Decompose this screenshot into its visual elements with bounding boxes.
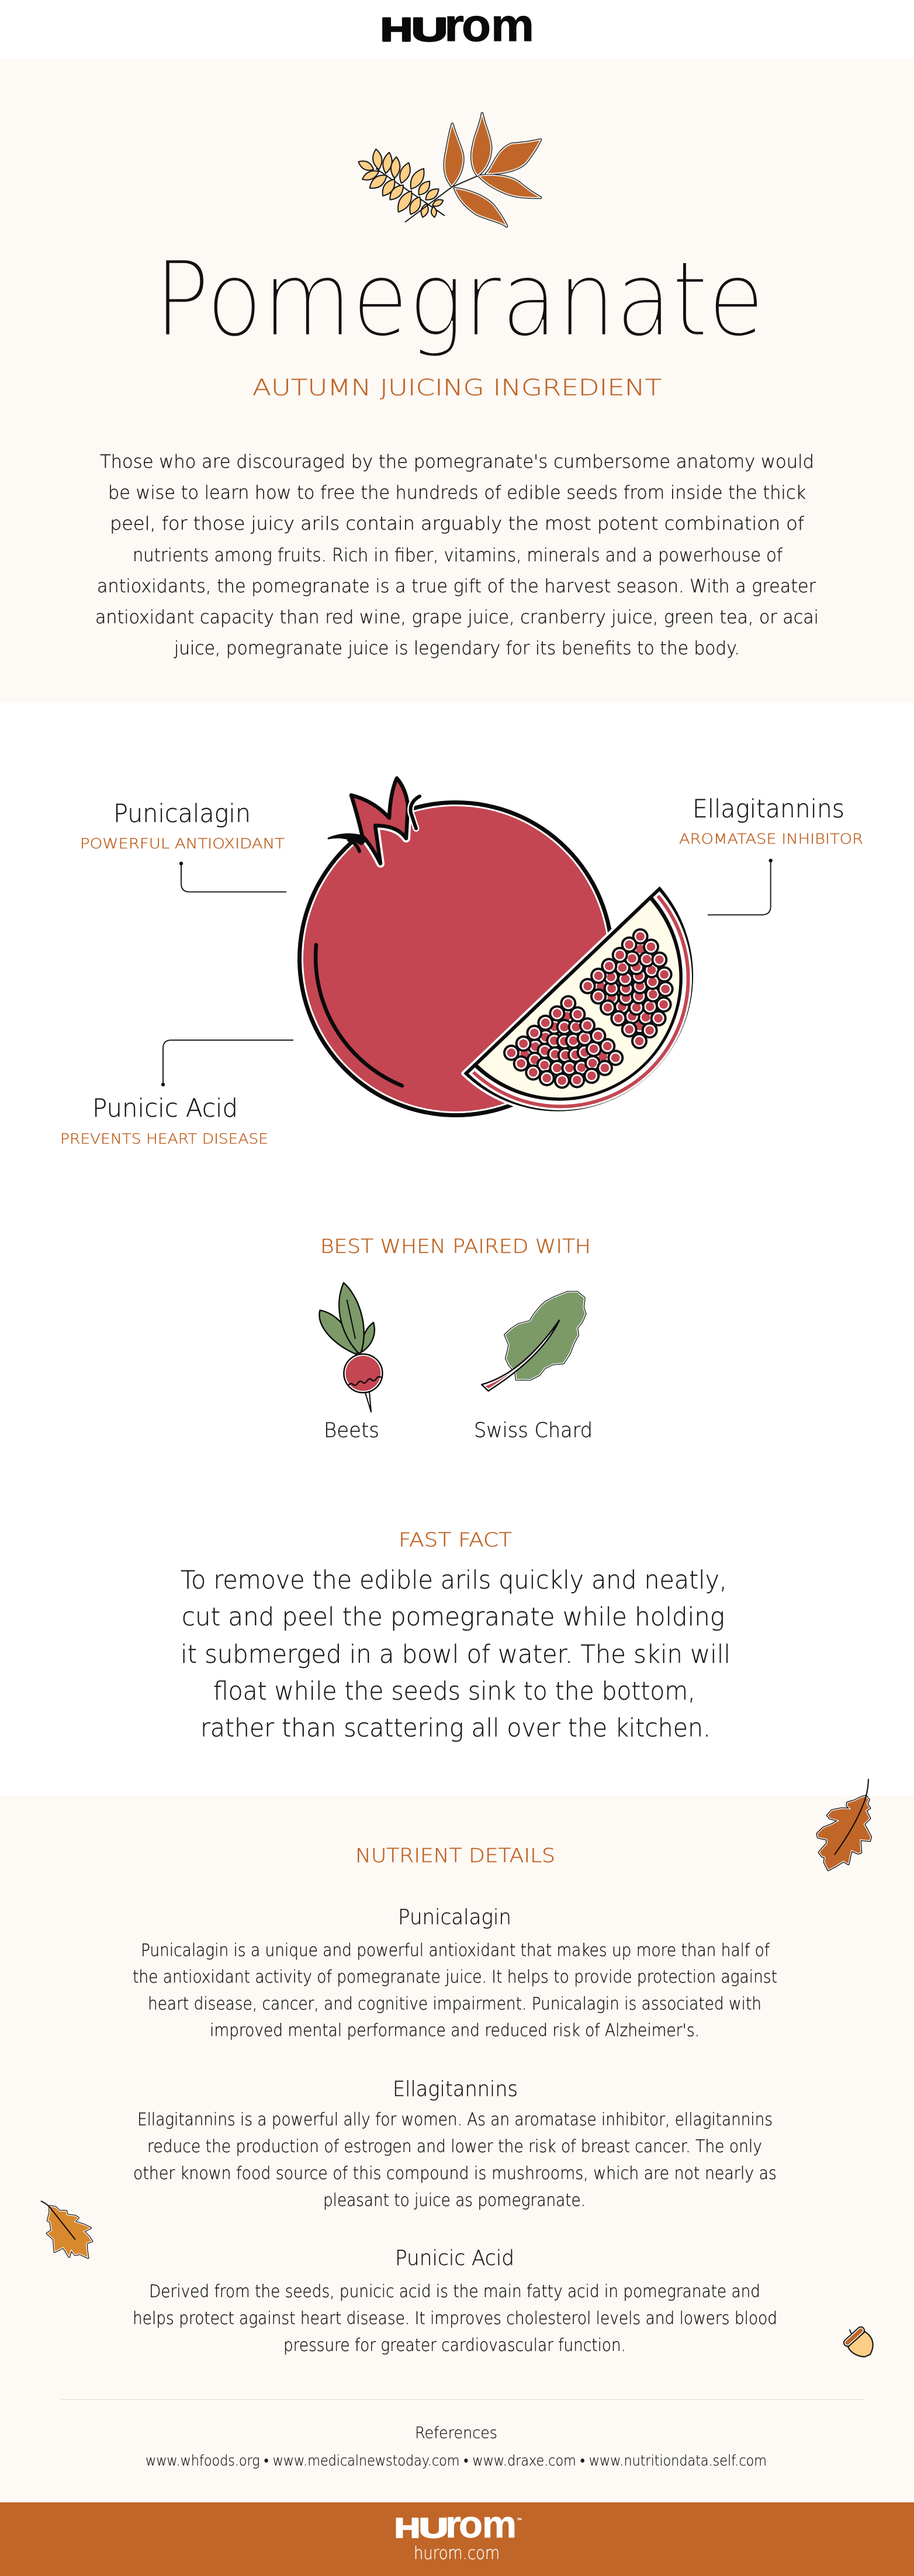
icon: oak leaf top right [817,1779,871,1870]
nutrient: Ellagitannins: reduce the production of estrogen and lower the risk of breast cancer. The only [147,2136,762,2156]
brand logo: top: r [444,0,464,51]
brand logo: footer: o [459,2503,483,2546]
divider rule [61,2399,865,2400]
callout: Punicic Acid: PREVENTS HEART DISEASE [60,1131,268,1147]
nutrient: Ellagitannins: other known food source of this compound is mushrooms, which are not nearly as [133,2163,777,2183]
references [146,2424,767,2469]
callout: Punicalagin [80,799,286,892]
callout: Punicalagin: POWERFUL ANTIOXIDANT [80,835,285,852]
brand logo: footer: m [482,2503,517,2546]
intro paragraph: peel, for those juicy arils contain arguably the most potent combination of [110,513,804,534]
callout: Ellagitannins: AROMATASE INHIBITOR [679,831,863,847]
nutrient: Punicalagin: Punicalagin [398,1905,511,1929]
slice seeds: lower cluster [503,995,624,1089]
heading: fast fact: FAST FACT [399,1528,512,1551]
heading: nutrient details: NUTRIENT DETAILS [355,1844,555,1867]
brand logo: top: U [411,11,448,49]
callout: Ellagitannins: Ellagitannins [693,795,844,824]
pairing: swiss chard [474,1292,593,1442]
fast fact text [181,1566,730,1743]
label: Beets: Beets [324,1419,379,1442]
subtitle: AUTUMN JUICING INGREDIENT [252,375,662,400]
icon: chard leaf [482,1292,586,1391]
dark orange leaves [405,113,541,226]
references: References [415,2424,497,2442]
yellow leaflet branch [358,149,445,217]
nutrient: Ellagitannins: Ellagitannins [393,2077,518,2101]
fast fact text: To remove the edible arils quickly and neatly, [181,1566,727,1595]
icon: autumn leaves sprig [358,113,541,226]
brand logo: top: m [491,0,534,51]
callout: Punicic Acid [60,1040,293,1147]
page background: cream nutrient band [0,1796,914,2502]
nutrient: Punicalagin: improved mental performance and reduced risk of Alzheimer's. [210,2021,700,2040]
callout: Ellagitannins [679,795,863,915]
nutrient: Punicalagin: Punicalagin is a unique and powerful antioxidant that makes up more than half of [141,1940,770,1960]
icon: acorn [847,2330,873,2357]
trademark: ™ [517,2518,522,2523]
nutrient: Punicic Acid: Punicic Acid [395,2246,514,2270]
slice rind and flesh [463,886,693,1111]
brand logo: top: H [380,11,413,49]
nutrient: Ellagitannins: Ellagitannins is a powerful ally for women. As an aromatase inhibitor, ellagitannins [137,2109,773,2129]
footer band [0,2502,914,2576]
references: www.whfoods.org • www.medicalnewstoday.com • www.draxe.com • www.nutritiondata.self.com [146,2452,767,2469]
pairing: beets [319,1283,382,1442]
fruit body [297,800,614,1117]
brand logo: footer [394,2503,517,2546]
brand logo: footer: r [445,2503,461,2546]
icon: beet [319,1283,382,1412]
nutrient: Punicalagin [133,1905,777,2040]
intro paragraph: juice, pomegranate juice is legendary for its benefits to the body. [174,638,740,659]
nutrient: Punicalagin: the antioxidant activity of pomegranate juice. It helps to provide protection against [133,1967,777,1987]
nutrient: Punicic Acid: pressure for greater cardiovascular function. [283,2335,626,2355]
fast fact text: float while the seeds sink to the bottom, [213,1677,695,1706]
nutrient: Ellagitannins [133,2077,777,2210]
brand logo: top [380,0,534,51]
footer url: hurom.com [414,2543,500,2564]
intro paragraph [95,451,819,659]
title: Pomegranate [154,239,764,360]
nutrient: Punicic Acid: helps protect against heart disease. It improves cholesterol levels and lowers blood [133,2308,777,2328]
callout: Punicalagin: Punicalagin [113,799,251,828]
fast fact text: cut and peel the pomegranate while holding [182,1603,725,1632]
nutrient: Punicalagin: heart disease, cancer, and cognitive impairment. Punicalagin is associated with [148,1994,761,2014]
intro paragraph: Those who are discouraged by the pomegranate's cumbersome anatomy would [100,451,814,472]
brand logo: footer: H [394,2512,420,2543]
brand logo: footer: U [419,2512,448,2543]
fruit highlight arc [316,945,402,1086]
illustration: whole pomegranate with slice [297,778,693,1117]
label: Swiss Chard: Swiss Chard [474,1419,593,1442]
nutrient: Punicic Acid [133,2246,777,2355]
fast fact text: rather than scattering all over the kitchen. [200,1714,711,1743]
intro paragraph: nutrients among fruits. Rich in fiber, vitamins, minerals and a powerhouse of [133,545,783,566]
intro paragraph: antioxidants, the pomegranate is a true gift of the harvest season. With a greater [97,576,816,597]
intro paragraph: antioxidant capacity than red wine, grape juice, cranberry juice, green tea, or acai [95,607,819,628]
callout: Punicic Acid: Punicic Acid [92,1094,238,1123]
slice seeds: upper cluster [580,928,674,1049]
brand logo: top: o [462,0,491,51]
page background: cream intro band [0,58,914,703]
fast fact text: it submerged in a bowl of water. The skin will [181,1640,730,1669]
intro paragraph: be wise to learn how to free the hundreds of edible seeds from inside the thick [108,482,806,503]
nutrient: Punicic Acid: Derived from the seeds, punicic acid is the main fatty acid in pomegranate and [149,2281,760,2301]
fruit crown [328,778,420,864]
heading: best when paired with: BEST WHEN PAIRED WITH [320,1235,591,1258]
nutrient: Ellagitannins: pleasant to juice as pomegranate. [323,2190,586,2210]
icon: serrated leaf left [41,2201,92,2258]
